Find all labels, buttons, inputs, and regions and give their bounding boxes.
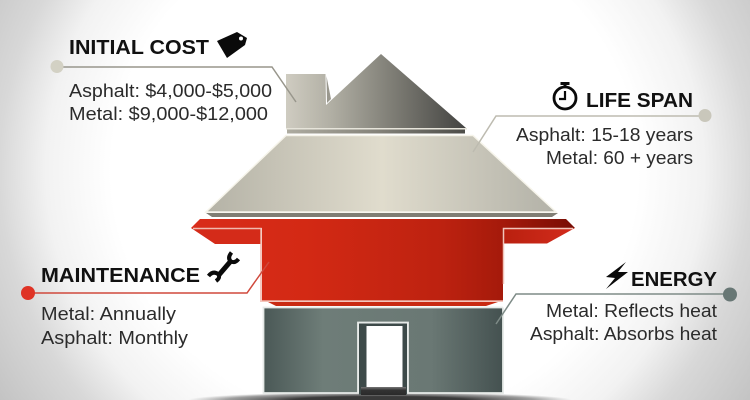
callout: initial cost: Metal: $9,000-$12,000 (69, 104, 268, 124)
ground shadow (188, 392, 572, 400)
text: maintenance frequency: Metal: Annually (41, 304, 176, 324)
marker dot (723, 288, 737, 302)
red wall and top band (191, 219, 575, 301)
marker dot (698, 109, 712, 122)
text: costs: Asphalt: $4,000-$5,000 (69, 81, 272, 101)
leader line (473, 116, 705, 152)
right eave (503, 228, 575, 244)
base outline (264, 308, 503, 393)
heading: life span: LIFE SPAN (586, 90, 693, 112)
icon: stopwatch (554, 84, 576, 109)
red sliver (268, 302, 498, 306)
leader line (496, 294, 730, 324)
leader line (57, 67, 296, 102)
left eave (191, 228, 261, 244)
roof band (286, 128, 467, 134)
icon: wrench (208, 252, 238, 281)
callout: energy: Asphalt: Absorbs heat (530, 324, 717, 344)
callout: life span: Metal: 60 + years (546, 148, 693, 168)
chimney and upper roof (286, 54, 466, 128)
heading: energy: ENERGY (631, 269, 718, 291)
marker dot (50, 60, 64, 73)
heading: maintenance: MAINTENANCE (41, 265, 200, 287)
callout: maintenance: Asphalt: Monthly (41, 328, 188, 348)
main roof (206, 136, 556, 212)
callout: life span (473, 84, 712, 168)
callout: initial cost (50, 32, 296, 124)
door (359, 324, 407, 395)
icon: price tag (217, 32, 247, 58)
text: energy effects: Metal: Reflects heat (546, 301, 717, 321)
chimney side (326, 76, 331, 103)
marker dot (21, 286, 35, 300)
leader line (28, 262, 269, 293)
grey base (264, 308, 503, 392)
house illustration (188, 54, 575, 400)
text: lifespans: Asphalt: 15-18 years (516, 125, 693, 145)
eave highlights (193, 228, 261, 302)
callout: maintenance (21, 252, 269, 348)
heading: initial cost: INITIAL COST (69, 37, 209, 59)
callout: energy (496, 262, 737, 344)
icon: lightning bolt (606, 262, 628, 289)
